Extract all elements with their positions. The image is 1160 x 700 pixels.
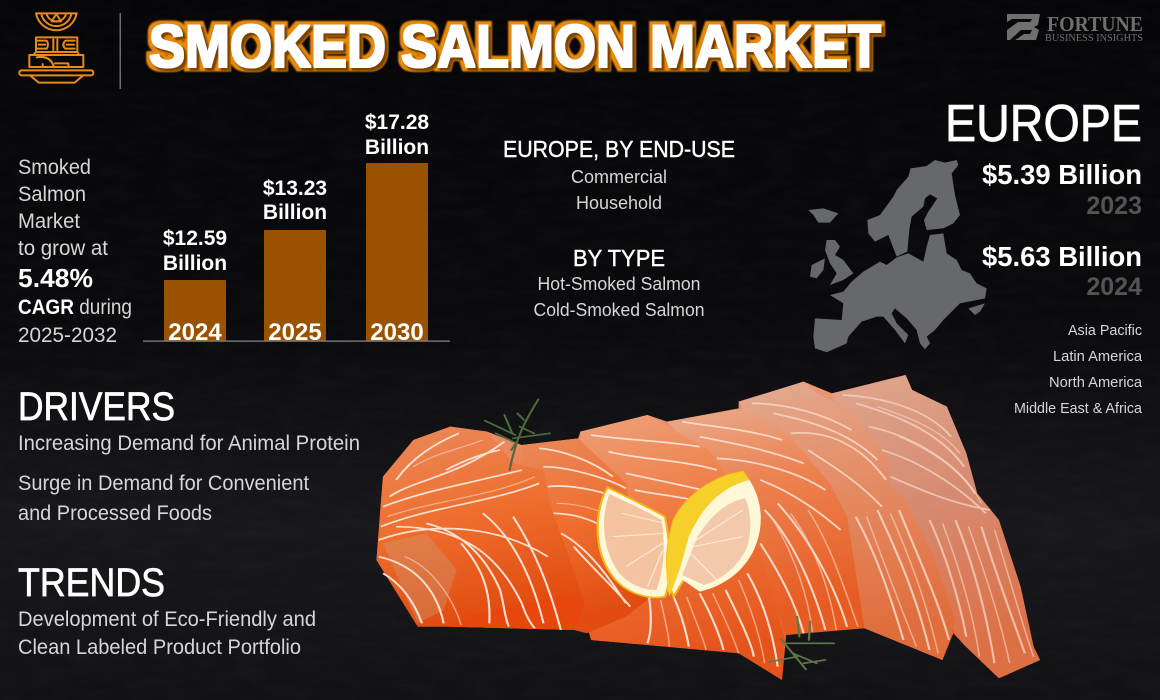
value 2023 — [982, 159, 1142, 220]
bar chart: market size — [143, 111, 450, 346]
salmon slice 3 — [667, 408, 864, 635]
driver list: and Processed Foods — [18, 502, 212, 525]
trend list — [18, 608, 316, 659]
heading: Europe: EUROPE — [945, 95, 1142, 153]
other regions list: Middle East & Africa — [1014, 400, 1143, 417]
bar: 2030 — [365, 111, 429, 346]
flesh striations — [387, 407, 1034, 663]
CAGR callout: CAGR during — [18, 296, 132, 319]
bar: 2030: Billion — [365, 136, 429, 159]
title: SMOKED SALMON MARKET — [149, 13, 881, 80]
segment: by type: Hot-Smoked Salmon — [538, 274, 700, 294]
segment: Europe by end-use: Commercial — [571, 167, 667, 187]
salmon slice 5 — [832, 375, 1040, 678]
brand logo: Fortune Business Insights — [1007, 12, 1143, 44]
value 2023: 2023 — [1086, 192, 1142, 220]
panel: drivers — [18, 385, 360, 525]
trend list: Development of Eco-Friendly and — [18, 608, 316, 631]
other regions list: Asia Pacific — [1068, 322, 1142, 339]
value 2024 — [982, 241, 1142, 301]
segment: by type — [534, 245, 704, 320]
CAGR callout: to grow at — [18, 237, 108, 260]
other regions list: North America — [1049, 374, 1143, 391]
driver list — [18, 432, 360, 525]
bar: 2030: $17.28 — [365, 111, 429, 134]
segment: Europe by end-use: EUROPE, BY END-USE — [503, 136, 735, 162]
brand name: FORTUNE — [1047, 12, 1143, 36]
heading: trends: TRENDS — [18, 561, 165, 605]
CAGR callout: 2025-2032 — [18, 324, 117, 347]
segment: by type: BY TYPE — [573, 245, 665, 271]
driver list: Increasing Demand for Animal Protein — [18, 432, 360, 455]
salmon slice 2 — [578, 415, 784, 680]
CAGR callout: Salmon — [18, 183, 86, 206]
panel: Europe values — [945, 95, 1143, 417]
icon: salmon dish logo — [19, 13, 93, 83]
photo: smoked salmon slices with lemon and rosemary — [377, 375, 1040, 680]
heading: drivers: DRIVERS — [18, 385, 175, 429]
segment: Europe by end-use: Household — [576, 193, 662, 213]
CAGR callout: Market — [18, 210, 80, 233]
other regions list — [1014, 322, 1143, 417]
header divider — [120, 13, 121, 89]
brand tagline: BUSINESS INSIGHTS — [1045, 33, 1143, 44]
trend list: Clean Labeled Product Portfolio — [18, 636, 301, 659]
bar: 2024: 2024 — [168, 319, 222, 346]
bar: 2030: 2030 — [370, 319, 424, 346]
CAGR callout: Smoked — [18, 156, 91, 179]
salmon slice 4 — [739, 382, 955, 660]
bar: 2025 — [263, 177, 327, 346]
segment: by type: Cold-Smoked Salmon — [534, 300, 704, 320]
map: Europe — [808, 160, 987, 352]
segment: Europe by end-use — [503, 136, 735, 213]
panel: trends — [18, 561, 316, 659]
bar: 2025: Billion — [263, 201, 327, 224]
bar: 2025: $13.23 — [263, 177, 327, 200]
bar: 2024 — [163, 227, 227, 346]
other regions list: Latin America — [1053, 348, 1143, 365]
salmon slice 1b — [517, 438, 648, 633]
CAGR callout: 5.48% — [18, 263, 93, 293]
bar: 2025: 2025 — [268, 319, 322, 346]
lemon twist slice — [598, 472, 761, 597]
value 2024: 2024 — [1086, 273, 1142, 301]
bar: 2024: $12.59 — [163, 227, 227, 250]
bar: 2024: Billion — [163, 252, 227, 275]
value 2024: $5.63 Billion — [982, 241, 1142, 272]
salmon base silhouette — [377, 375, 1040, 680]
value 2023: $5.39 Billion — [982, 159, 1142, 190]
CAGR callout — [18, 156, 132, 347]
rosemary sprig top — [485, 399, 550, 470]
salmon slice 1 — [377, 427, 585, 630]
driver list: Surge in Demand for Convenient — [18, 472, 309, 495]
rosemary sprig bottom — [769, 617, 834, 669]
icon: brand mark — [1007, 14, 1040, 40]
